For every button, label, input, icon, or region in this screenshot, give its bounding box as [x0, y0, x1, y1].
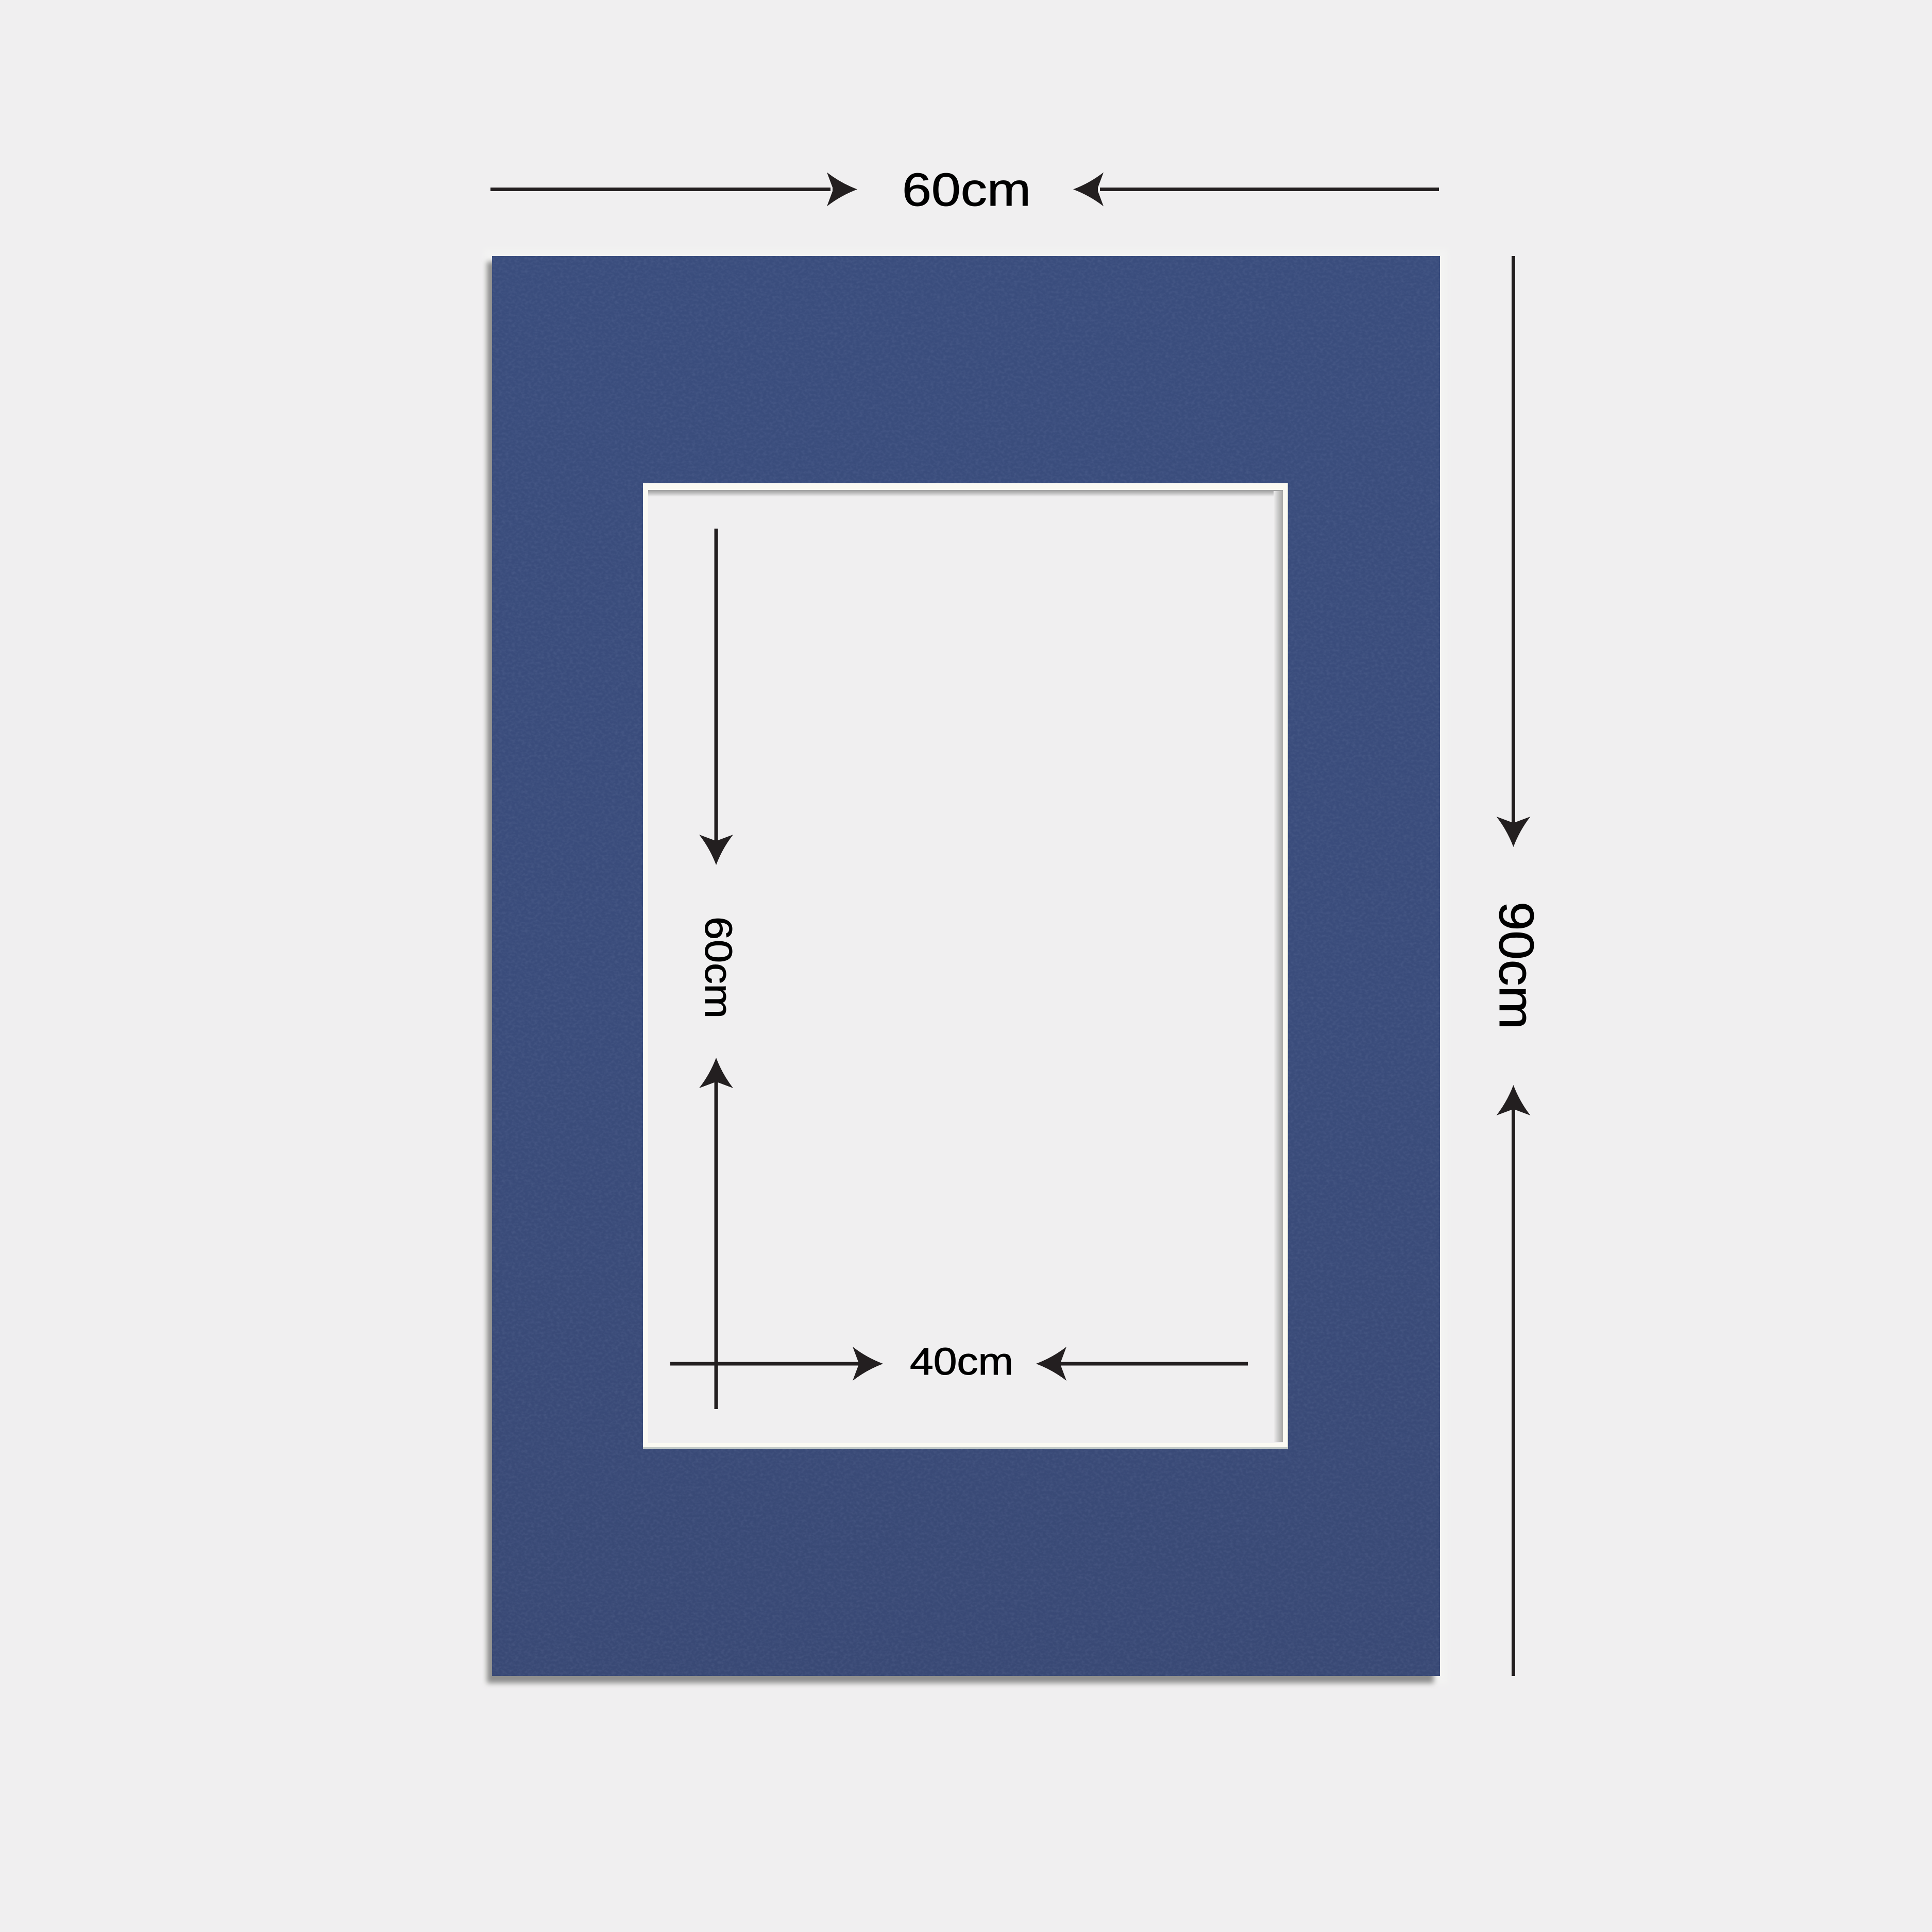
arrow: overall width, right — [1073, 172, 1439, 206]
label: overall width 60cm: 60cm — [902, 164, 1031, 216]
arrow: window height, top — [699, 529, 733, 865]
window opening — [643, 483, 1288, 1449]
label: window height 60cm: 60cm — [697, 917, 740, 1019]
label: overall height 90cm: 90cm — [1489, 902, 1544, 1029]
label: window width 40cm: 40cm — [910, 1340, 1013, 1383]
arrow: window width, right — [1036, 1347, 1248, 1381]
arrow: overall height, bottom — [1496, 1085, 1530, 1676]
mat board drop shadow — [484, 249, 1448, 1684]
arrow: overall width, left — [490, 172, 857, 206]
panel: blue mat board with window opening — [484, 249, 1448, 1684]
arrow: window width, left — [670, 1347, 883, 1381]
arrow: window height, bottom — [699, 1058, 733, 1409]
mat board surface — [492, 256, 1440, 1676]
arrow: overall height, top — [1496, 256, 1530, 847]
